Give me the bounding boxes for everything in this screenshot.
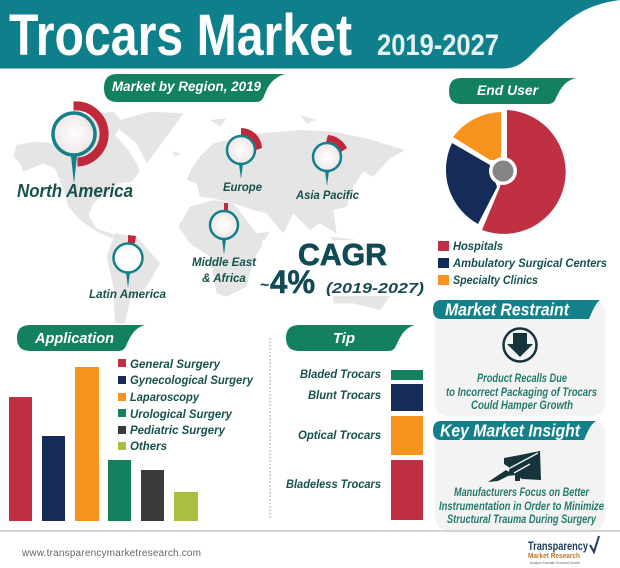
heading: market by region: Market by Region, 2019 — [112, 79, 261, 94]
legend: end user: Ambulatory Surgical Centers — [452, 258, 607, 270]
legend: end user: Hospitals — [453, 241, 503, 253]
label: middle east and africa: Middle East — [192, 257, 257, 269]
heading: key market insight: Key Market Insight — [440, 420, 581, 440]
label: latin america: Latin America — [89, 289, 167, 301]
logo: transparency market research: Analyze Evaluate Succeed Growth — [530, 560, 580, 565]
heading: application: Application — [34, 330, 114, 347]
marker: middle east and africa: & Africa — [202, 273, 246, 285]
logo: transparency market research — [528, 536, 599, 565]
legend: application: Others — [130, 441, 167, 453]
pie chart: end user — [446, 110, 566, 234]
heading: market by region — [104, 74, 285, 102]
heading: tip: Tip — [333, 330, 355, 347]
CAGR callout: CAGR — [298, 237, 387, 272]
bar chart: application — [9, 367, 198, 521]
heading: end user: End User — [477, 82, 540, 98]
text: key market insight — [439, 487, 604, 526]
title: Trocars Market — [9, 3, 352, 68]
label: europe: Europe — [223, 182, 263, 194]
CAGR callout: (2019-2027) — [326, 280, 424, 297]
icon: down arrow — [504, 328, 536, 362]
header banner — [0, 0, 620, 68]
marker: middle east and africa — [192, 203, 257, 285]
legend: application: General Surgery — [130, 359, 221, 371]
legend: end user: Specialty Clinics — [453, 275, 538, 287]
labels: tip: Blunt Trocars — [308, 390, 381, 402]
heading: application — [17, 325, 145, 351]
title years: 2019-2027 — [377, 29, 499, 62]
label: north america: North America — [17, 181, 133, 201]
legend: application: Laparoscopy — [130, 392, 200, 404]
logo: transparency market research: Market Research — [528, 551, 580, 560]
text: market restraint: Could Hamper Growth — [471, 400, 573, 412]
marker: asia pacific — [295, 135, 360, 202]
marker: latin america — [89, 235, 167, 301]
text: key market insight: Manufacturers Focus on Better — [454, 487, 589, 499]
panel: market restraint — [433, 300, 605, 416]
marker: europe — [223, 128, 263, 194]
legend: application: Gynecological Surgery — [130, 375, 254, 387]
legend: application: Urological Surgery — [130, 409, 233, 421]
heading: end user — [449, 78, 576, 104]
logo: transparency market research: Transparency — [528, 539, 588, 553]
labels: tip: Bladeless Trocars — [286, 479, 381, 491]
stacked bar: tip — [391, 370, 423, 520]
marker: north america — [17, 102, 133, 201]
legend: application — [118, 359, 254, 453]
labels: tip: Bladed Trocars — [300, 369, 381, 381]
legend: end user — [438, 241, 607, 287]
label: asia pacific: Asia Pacific — [295, 190, 360, 202]
footer url: www.transparencymarketresearch.com — [21, 548, 201, 559]
heading: market restraint: Market Restraint — [445, 300, 570, 320]
heading: tip — [286, 325, 415, 351]
CAGR callout: 4% — [270, 264, 315, 300]
icon: hand holding scalpel — [488, 451, 541, 482]
CAGR callout: ~ — [260, 277, 269, 294]
panel: key market insight — [433, 420, 605, 530]
labels: tip — [286, 369, 381, 491]
CAGR callout — [260, 237, 426, 300]
text: market restraint — [446, 373, 597, 412]
legend: application: Pediatric Surgery — [130, 425, 226, 437]
text: market restraint: Product Recalls Due — [477, 373, 567, 385]
labels: tip: Optical Trocars — [298, 430, 381, 442]
world map — [13, 112, 405, 323]
